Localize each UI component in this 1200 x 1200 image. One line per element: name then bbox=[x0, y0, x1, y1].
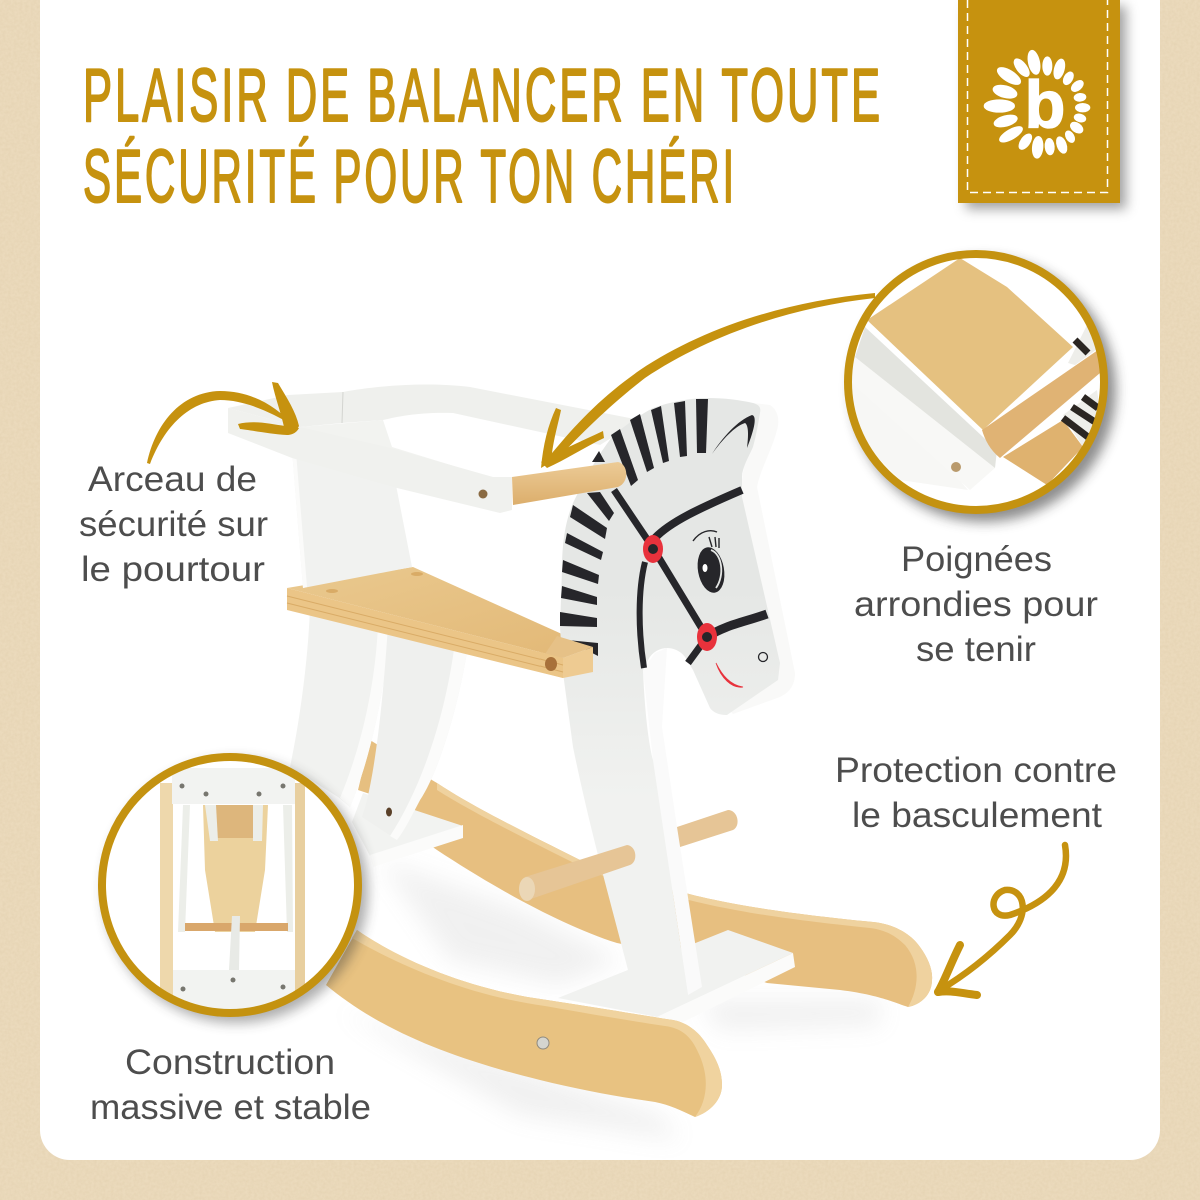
near rocker bbox=[326, 930, 722, 1117]
bridle rosettes bbox=[643, 535, 717, 651]
label: safety hoop: le pourtour bbox=[81, 550, 265, 589]
arrow: anti-tip protection bbox=[938, 845, 1066, 995]
handle dowel bbox=[512, 462, 626, 505]
horse body and head bbox=[560, 398, 795, 995]
safety hoop bbox=[228, 385, 640, 513]
label: safety hoop: Arceau de bbox=[88, 460, 257, 499]
front base plate bbox=[558, 930, 795, 1022]
rear legs bbox=[290, 608, 468, 840]
nostril and mouth bbox=[716, 652, 768, 687]
ear bbox=[712, 415, 755, 454]
title bbox=[83, 53, 883, 218]
label: sturdy construction bbox=[90, 1043, 371, 1127]
inset circle: rounded handles bbox=[840, 254, 1116, 522]
rear footrest dowel bbox=[677, 810, 738, 848]
eye bbox=[693, 531, 728, 595]
label: rounded handles bbox=[854, 540, 1098, 669]
label: sturdy construction: massive et stable bbox=[90, 1088, 371, 1127]
bridle bbox=[614, 490, 767, 668]
armrest bar bbox=[228, 408, 512, 513]
arrow: handles bbox=[541, 293, 875, 468]
label: anti-tip protection: Protection contre bbox=[835, 751, 1117, 790]
seat front end bbox=[540, 636, 593, 678]
inset circle: sturdy underside bbox=[102, 757, 368, 1023]
arrow: safety hoop bbox=[147, 382, 299, 464]
label: rounded handles: Poignées bbox=[901, 540, 1052, 579]
icon: brand flower logo: b bbox=[1025, 68, 1065, 142]
icon: brand flower logo bbox=[984, 49, 1090, 158]
label: anti-tip protection bbox=[835, 751, 1117, 835]
rear rocker stub bbox=[358, 740, 378, 795]
mane stripes bbox=[560, 399, 708, 656]
label: rounded handles: arrondies pour bbox=[854, 585, 1098, 624]
brand label tag bbox=[958, 0, 1126, 209]
label: safety hoop bbox=[79, 460, 268, 589]
front footrest dowel bbox=[519, 845, 635, 901]
floor shadows bbox=[340, 860, 880, 1140]
seat post bbox=[292, 450, 412, 588]
rocking horse product photo bbox=[228, 385, 932, 1140]
label: safety hoop: sécurité sur bbox=[79, 505, 268, 544]
label: anti-tip protection: le basculement bbox=[852, 796, 1102, 835]
far rocker bbox=[415, 770, 932, 1007]
seat bbox=[287, 567, 593, 678]
label: sturdy construction: Construction bbox=[125, 1043, 335, 1082]
label: rounded handles: se tenir bbox=[916, 630, 1036, 669]
rear cross base bbox=[352, 793, 463, 867]
